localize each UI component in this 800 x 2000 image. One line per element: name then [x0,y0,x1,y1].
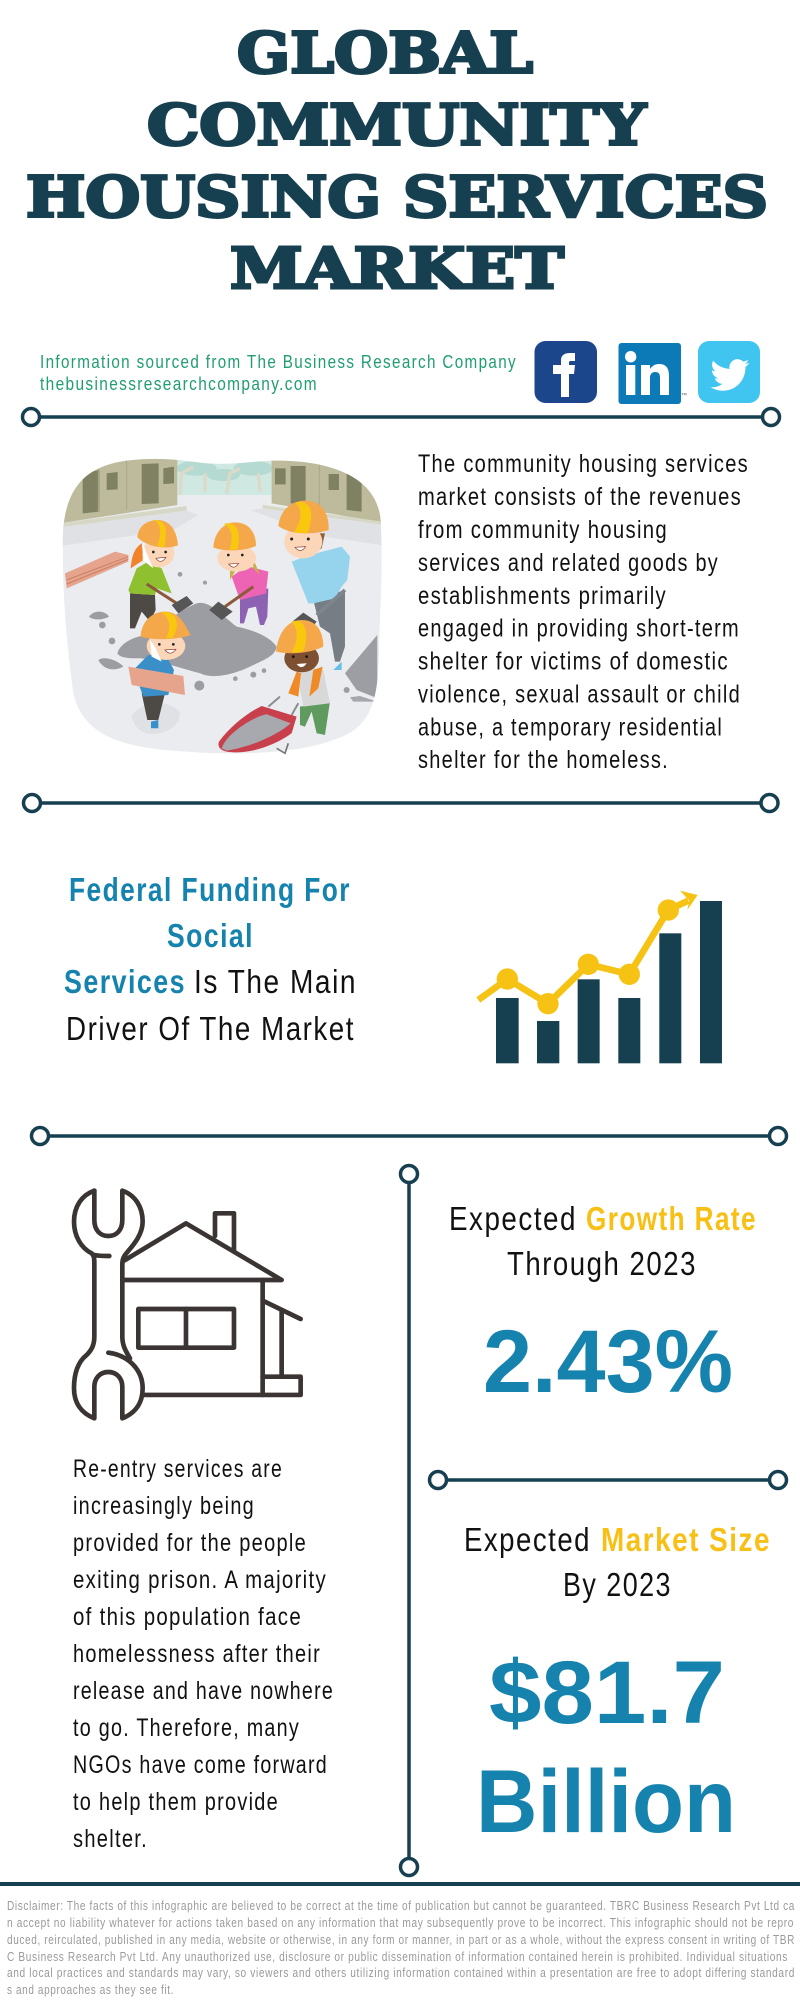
heading: main driver: Services [64,963,186,1000]
source text [40,352,517,394]
title [26,20,768,302]
stat: market size [464,1521,771,1851]
icon: wrench and house [74,1191,301,1418]
description text: abuse, a temporary residential [418,714,723,742]
body text: re-entry services: increasingly being [73,1492,255,1520]
body text: re-entry services: of this population face [73,1603,302,1631]
body text: re-entry services: homelessness after their [73,1640,321,1668]
heading: main driver: Is The Main [194,963,357,1000]
title: COMMUNITY [147,92,647,158]
stat: growth rate: Expected [449,1200,577,1237]
stat: market size: Market Size [601,1521,771,1558]
value: $81.7 Billion: Billion [476,1751,736,1851]
stat: market size: By 2023 [563,1566,672,1603]
icon: linkedin: ™ [681,392,687,399]
stat: market size: Expected [464,1521,591,1558]
body text: re-entry services: to go. Therefore, many [73,1714,300,1742]
wood planks [65,552,128,588]
body text: re-entry services: Re-entry services are [73,1455,283,1483]
illustration: children building [60,453,387,757]
value: $81.7 Billion [476,1642,736,1851]
source text: Information sourced from The Business Research Company [40,352,517,372]
body text: re-entry services: to help them provide [73,1788,279,1816]
heading: main driver: Federal Funding For [69,871,351,908]
illustration background [60,453,387,757]
chart: rising bars with trend line [478,891,722,1063]
description text: establishments primarily [418,582,667,610]
stat: growth rate: Growth Rate [586,1200,757,1237]
rubble pile [117,603,277,676]
description text: shelter for victims of domestic [418,648,729,676]
heading: main driver [64,871,357,1047]
worker: girl with green shirt [128,520,193,628]
body text: re-entry services: exiting prison. A majority [73,1566,327,1594]
disclaimer [7,1898,795,1997]
stat: growth rate [449,1200,757,1411]
wheelbarrow [218,706,297,753]
stat: growth rate: Through 2023 [507,1245,697,1282]
worker: adult with blue shirt [278,501,350,670]
value: $81.7 Billion: $81.7 [489,1642,725,1742]
worker: girl with pink shirt [209,522,268,625]
body text: re-entry services: NGOs have come forward [73,1751,328,1779]
body text: re-entry services: release and have nowhere [73,1677,334,1705]
title: HOUSING SERVICES [26,164,768,230]
ground shadows [132,703,180,734]
icon: twitter [698,341,760,403]
description text: services and related goods by [418,549,719,577]
body text: re-entry services: provided for the people [73,1529,307,1557]
trend line [478,891,698,1014]
heading: main driver: Driver Of The Market [66,1010,355,1047]
title: MARKET [230,236,564,302]
description text: shelter for the homeless. [418,746,669,774]
value: 2.43%: 2.43% [483,1311,733,1411]
title: GLOBAL [237,20,533,86]
description text [418,450,749,774]
heading: main driver: Social [167,917,254,954]
bars [496,901,722,1063]
worker: child with wheelbarrow [268,620,330,735]
icon: facebook [534,341,597,403]
body text: re-entry services [73,1455,334,1853]
disclaimer: s and approaches as they see fit. [7,1982,174,1997]
body text: re-entry services: shelter. [73,1825,148,1853]
worker: child with plank [128,612,191,728]
icon: linkedin [618,343,687,404]
description text: from community housing [418,516,668,544]
source text: thebusinessresearchcompany.com [40,374,318,394]
